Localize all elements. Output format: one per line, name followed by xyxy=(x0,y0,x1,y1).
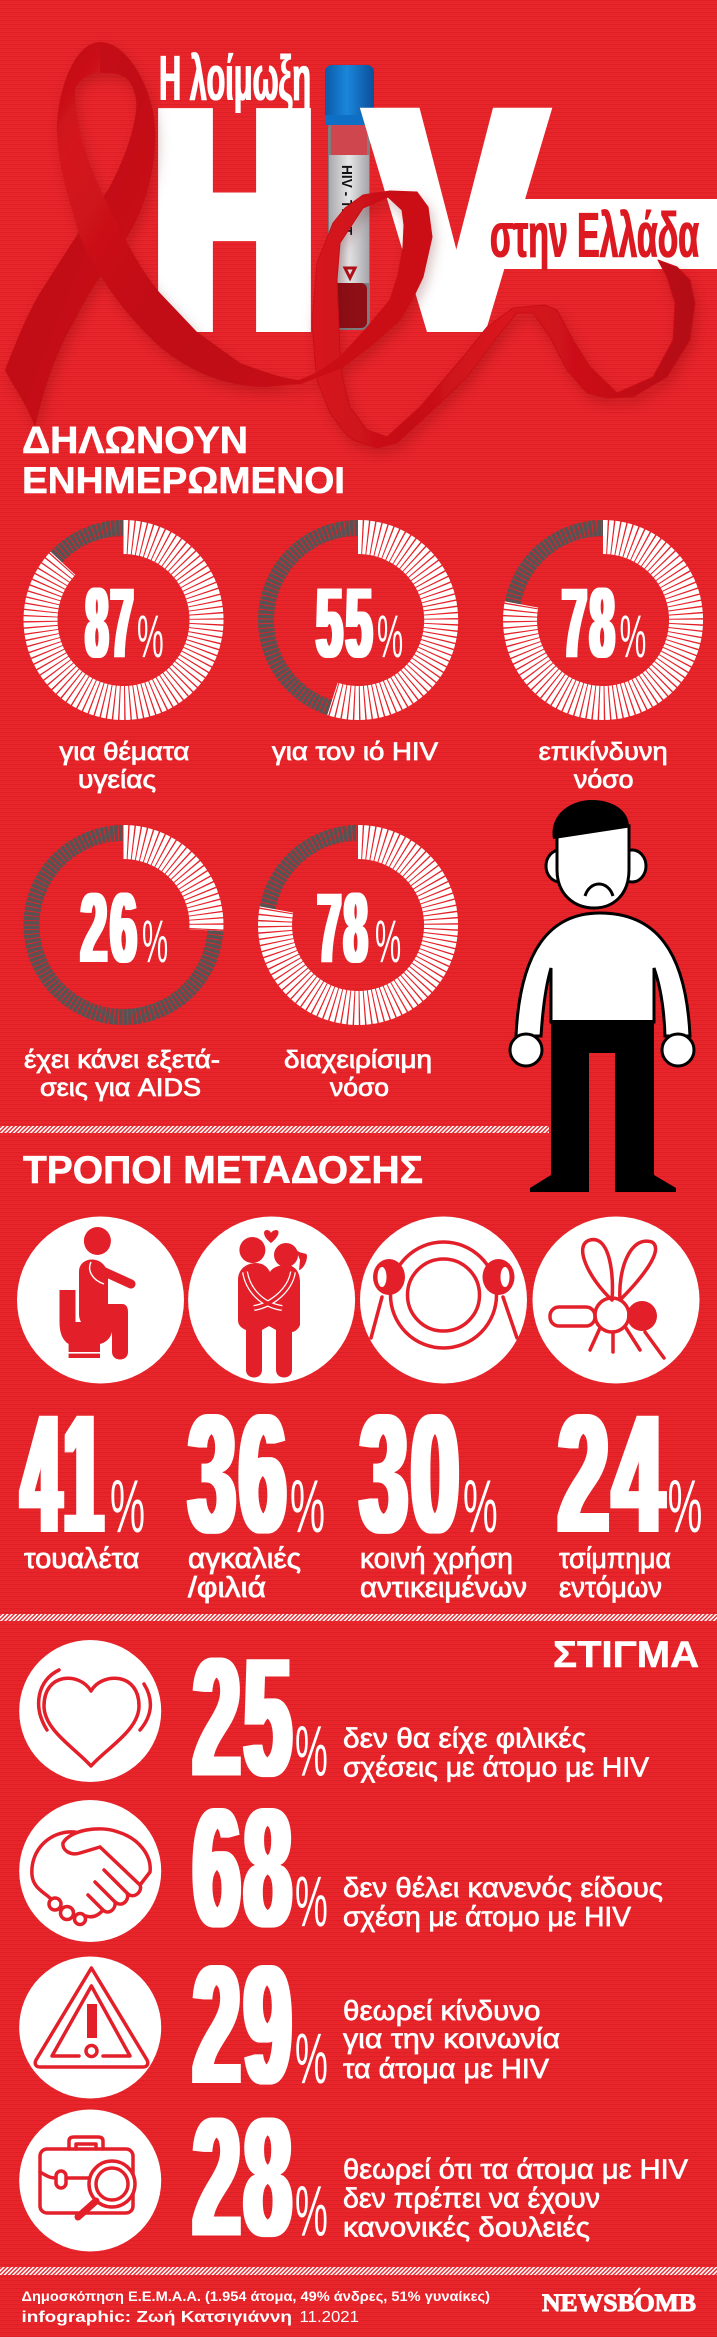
logo: NEWSBOMB: NEWSBOMB xyxy=(542,2290,696,2317)
white strip behind subtitle xyxy=(495,199,717,269)
stat: 30% shared objects xyxy=(360,1380,527,1604)
stat: 24% insect bite: τσίμπημα xyxy=(559,1543,671,1575)
donut: 26% tested for AIDS: % xyxy=(142,909,168,976)
stat: 24% insect bite: % xyxy=(668,1464,702,1548)
heading: ΤΡΟΠΟΙ ΜΕΤΑΔΟΣΗΣ: ΤΡΟΠΟΙ ΜΕΤΑΔΟΣΗΣ xyxy=(23,1149,423,1192)
stat: 41% toilet: τουαλέτα xyxy=(24,1543,140,1575)
stat: 29% danger to society: 29 xyxy=(193,1931,295,2120)
panel: informed respondents xyxy=(22,420,694,1192)
donut: 78% dangerous disease: 78 xyxy=(562,569,618,679)
stat: 68% no relationship: δεν θέλει κανενός είδους xyxy=(343,1872,663,1903)
header panel xyxy=(5,36,717,448)
donut: 78% dangerous disease xyxy=(513,528,686,794)
stat: 28% no normal jobs: % xyxy=(295,2172,328,2251)
stat: 25% no friendship xyxy=(193,1624,649,1812)
stat: 29% danger to society: θεωρεί κίνδυνο xyxy=(343,1995,540,2026)
date: 11.2021 xyxy=(300,2309,359,2326)
stat: 25% no friendship: % xyxy=(295,1712,328,1791)
donut: 26% tested for AIDS xyxy=(24,833,220,1102)
icon: blood test tube xyxy=(325,65,374,330)
donut: 55% HIV virus: % xyxy=(377,604,403,671)
donut: 78% manageable disease: % xyxy=(375,909,401,976)
stat: 36% hugs and kisses: % xyxy=(290,1464,325,1548)
stat: 68% no relationship: 68 xyxy=(193,1774,295,1963)
stat: 24% insect bite: 24 xyxy=(558,1379,668,1568)
stat: 68% no relationship: σχέση με άτομο με HIV xyxy=(343,1901,631,1932)
header panel: Η λοίμωξη xyxy=(159,42,311,114)
donut: 78% manageable disease: νόσο xyxy=(330,1074,389,1102)
stat: 28% no normal jobs xyxy=(193,2084,688,2272)
donut: 87% health xyxy=(41,528,207,794)
icon: sad man figure xyxy=(510,800,694,1192)
stat: 68% no relationship xyxy=(193,1774,663,1963)
stat: 28% no normal jobs: θεωρεί ότι τα άτομα με HIV xyxy=(343,2154,688,2185)
donut: 26% tested for AIDS: σεις για AIDS xyxy=(40,1074,201,1102)
stat: 28% no normal jobs: δεν πρέπει να έχουν xyxy=(343,2183,600,2214)
stat: 29% danger to society: για την κοινωνία xyxy=(343,2023,560,2054)
stat: 25% no friendship: σχέσεις με άτομο με HIV xyxy=(343,1751,649,1782)
donut: 87% health: % xyxy=(137,604,164,671)
red ribbon xyxy=(5,42,695,448)
stat: 41% toilet: % xyxy=(110,1464,145,1548)
infographic credit: infographic: Ζωή Κατσιγιάννη xyxy=(22,2309,292,2326)
icon: mosquito xyxy=(532,1216,700,1384)
stat: 29% danger to society: τα άτομα με HIV xyxy=(343,2053,549,2084)
stat: 30% shared objects: 30 xyxy=(360,1380,463,1569)
icon: hugging couple xyxy=(188,1216,355,1384)
panel: stigma xyxy=(19,1624,699,2272)
donut: 55% HIV virus: για τον ιό HIV xyxy=(272,738,438,766)
donut: 87% health: για θέματα xyxy=(59,738,189,766)
icon: toilet xyxy=(17,1216,184,1384)
donut: 26% tested for AIDS: έχει κάνει εξετά- xyxy=(24,1046,220,1074)
donut: 78% manageable disease: διαχειρίσιμη xyxy=(284,1046,432,1074)
stat: 29% danger to society xyxy=(193,1931,560,2120)
icon: blood test tube: HIV - TEST xyxy=(338,165,355,235)
icon: shared plate and cutlery xyxy=(360,1216,527,1384)
stat: 41% toilet: 41 xyxy=(22,1380,106,1569)
donut: 78% dangerous disease: νόσο xyxy=(574,766,634,794)
stat: 41% toilet xyxy=(22,1380,145,1575)
footer xyxy=(22,2288,696,2326)
stat: 28% no normal jobs: κανονικές δουλειές xyxy=(343,2211,590,2242)
stat: 36% hugs and kisses: 36 xyxy=(189,1380,290,1569)
survey source note: Δημοσκόπηση Ε.Ε.Μ.Α.Α. (1.954 άτομα, 49% άνδρες, 51% γυναίκες) xyxy=(22,2289,490,2304)
heading: ΔΗΛΩΝΟΥΝ ΕΝΗΜΕΡΩΜΕΝΟΙ xyxy=(22,420,345,501)
icon: heart xyxy=(19,1640,161,1782)
icon: handshake xyxy=(19,1800,161,1942)
donut: 78% manageable disease: 78 xyxy=(318,873,370,984)
stat: 25% no friendship: δεν θα είχε φιλικές xyxy=(343,1723,586,1754)
donut: 87% health: 87 xyxy=(86,568,136,678)
stat: 29% danger to society: % xyxy=(295,2019,328,2098)
stat: 68% no relationship: % xyxy=(295,1862,328,1941)
stat: 36% hugs and kisses: αγκαλιές xyxy=(188,1543,301,1575)
icon: briefcase and magnifier xyxy=(19,2110,161,2252)
donut: 78% dangerous disease: επικίνδυνη xyxy=(539,738,668,766)
title letter H: H xyxy=(155,47,314,392)
stat: 30% shared objects: % xyxy=(463,1464,498,1548)
icon: warning triangle xyxy=(19,1956,161,2098)
stat: 28% no normal jobs: 28 xyxy=(193,2084,295,2272)
stat: 30% shared objects: κοινή χρήση xyxy=(360,1543,513,1575)
donut: 78% dangerous disease: % xyxy=(620,604,646,671)
stat: 24% insect bite: εντόμων xyxy=(559,1572,662,1604)
stat: 24% insect bite xyxy=(558,1379,702,1604)
donut: 55% HIV virus xyxy=(266,528,441,766)
donut: 78% manageable disease xyxy=(268,833,441,1102)
stat: 25% no friendship: 25 xyxy=(193,1624,295,1812)
stat: 36% hugs and kisses: /φιλιά xyxy=(188,1572,266,1604)
donut: 55% HIV virus: 55 xyxy=(316,569,376,679)
stat: 36% hugs and kisses xyxy=(188,1380,325,1604)
donut: 26% tested for AIDS: 26 xyxy=(81,874,140,984)
panel: transmission routes xyxy=(17,1149,702,1604)
stat: 30% shared objects: αντικειμένων xyxy=(360,1572,527,1604)
donut: 87% health: υγείας xyxy=(78,766,156,794)
heading: ΣΤΙΓΜΑ: ΣΤΙΓΜΑ xyxy=(553,1634,699,1675)
title letter V: V xyxy=(368,36,545,401)
heading: ΔΗΛΩΝΟΥΝ ΕΝΗΜΕΡΩΜΕΝΟΙ: ΕΝΗΜΕΡΩΜΕΝΟΙ xyxy=(22,460,345,501)
heading: ΔΗΛΩΝΟΥΝ ΕΝΗΜΕΡΩΜΕΝΟΙ: ΔΗΛΩΝΟΥΝ xyxy=(22,420,248,462)
